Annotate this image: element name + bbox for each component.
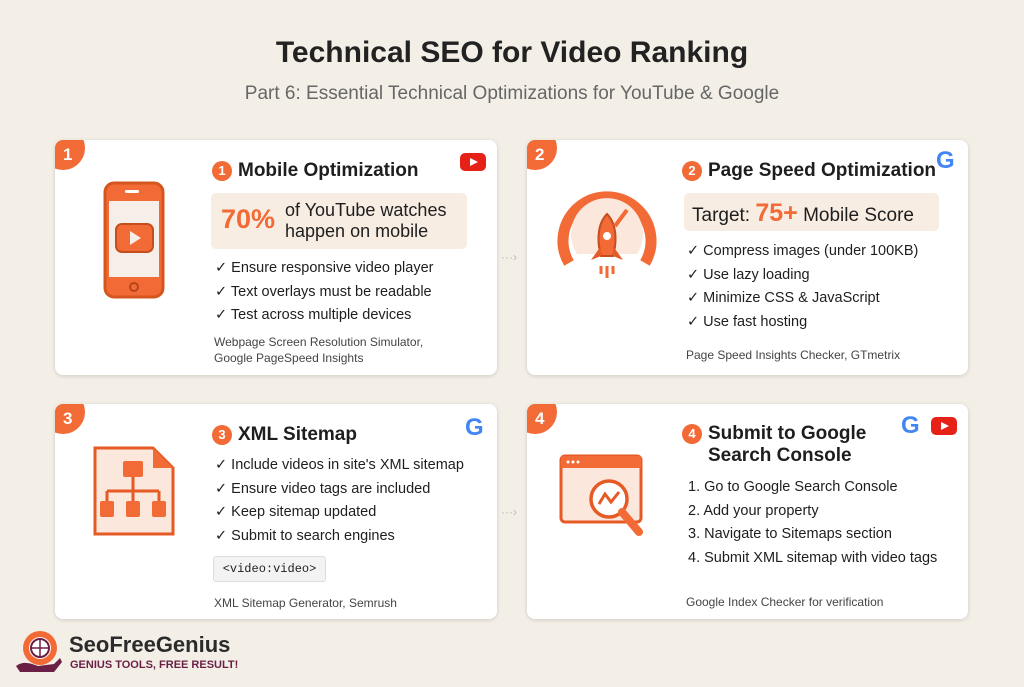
- checklist: ✓ Include videos in site's XML sitemap: [215, 457, 464, 473]
- tools: XML Sitemap Generator, Semrush: [214, 596, 397, 610]
- icon: browser magnifier: [560, 454, 643, 536]
- heading: [682, 423, 866, 466]
- icon: speedometer rocket: [557, 191, 657, 278]
- logo: SeoFreeGenius: [69, 632, 230, 657]
- checklist: ✓ Ensure responsive video player: [215, 260, 433, 276]
- heading: Submit to Google: [708, 423, 866, 444]
- stat callout: 70%: [221, 204, 275, 234]
- title: Technical SEO for Video Ranking: [276, 36, 748, 69]
- heading: 3: [218, 427, 226, 442]
- numbered steps: 4. Submit XML sitemap with video tags: [688, 550, 937, 566]
- checklist: ✓ Text overlays must be readable: [215, 284, 432, 300]
- checklist: ✓ Compress images (under 100KB): [687, 243, 918, 259]
- numbered steps: 2. Add your property: [688, 502, 819, 518]
- logo: [16, 631, 238, 672]
- panel: mobile optimization: 1: [63, 145, 72, 164]
- icon: phone: [104, 182, 164, 298]
- icon: google: G: [936, 147, 955, 174]
- checklist: [687, 243, 918, 330]
- tools: Webpage Screen Resolution Simulator,: [214, 335, 423, 349]
- heading: 2: [688, 163, 696, 178]
- heading: 4: [688, 426, 696, 441]
- checklist: ✓ Use lazy loading: [687, 266, 810, 282]
- checklist: ✓ Minimize CSS & JavaScript: [687, 290, 880, 306]
- code tag: <video:video>: [223, 562, 316, 576]
- tools: [214, 335, 423, 365]
- arrows: ···›: [501, 250, 517, 264]
- logo: GENIUS TOOLS, FREE RESULT!: [70, 659, 238, 671]
- target callout: Target: 75+ Mobile Score: [692, 199, 914, 227]
- panel: mobile optimization: [55, 140, 497, 375]
- checklist: ✓ Ensure video tags are included: [215, 480, 430, 496]
- checklist: ✓ Keep sitemap updated: [215, 504, 376, 520]
- target callout: [684, 193, 939, 231]
- panel: search console: 4: [535, 409, 544, 428]
- icon: youtube: [460, 153, 486, 171]
- tools: Google Index Checker for verification: [686, 595, 883, 609]
- text: ···›: [501, 505, 517, 519]
- heading: Mobile Optimization: [238, 160, 418, 181]
- numbered steps: [688, 479, 937, 566]
- icon: google: G: [465, 414, 484, 441]
- stat callout: happen on mobile: [285, 221, 428, 241]
- numbered steps: 3. Navigate to Sitemaps section: [688, 526, 892, 542]
- checklist: ✓ Submit to search engines: [215, 528, 395, 544]
- heading: Search Console: [708, 445, 852, 466]
- tools: Page Speed Insights Checker, GTmetrix: [686, 348, 900, 362]
- checklist: ✓ Use fast hosting: [687, 314, 807, 330]
- checklist: ✓ Test across multiple devices: [215, 307, 411, 323]
- tools: Google PageSpeed Insights: [214, 351, 363, 365]
- heading: 1: [218, 163, 226, 178]
- icon: gear hand: [16, 631, 62, 672]
- numbered steps: 1. Go to Google Search Console: [688, 479, 898, 495]
- stat callout: of YouTube watches: [285, 200, 446, 220]
- panel: page speed: [527, 140, 968, 375]
- icon: sitemap file: [94, 446, 174, 536]
- stat callout: [211, 193, 467, 249]
- subtitle: Part 6: Essential Technical Optimizations for YouTube & Google: [245, 83, 779, 104]
- panel: xml sitemap: [55, 404, 497, 619]
- panel: xml sitemap: 3: [63, 409, 72, 428]
- panel: search console: [527, 404, 968, 619]
- panel: page speed: 2: [535, 145, 544, 164]
- icons: google + youtube: G: [901, 412, 920, 439]
- heading: XML Sitemap: [238, 424, 357, 445]
- code tag: [213, 556, 326, 582]
- checklist: [215, 260, 434, 323]
- heading: Page Speed Optimization: [708, 160, 936, 181]
- checklist: [215, 457, 464, 544]
